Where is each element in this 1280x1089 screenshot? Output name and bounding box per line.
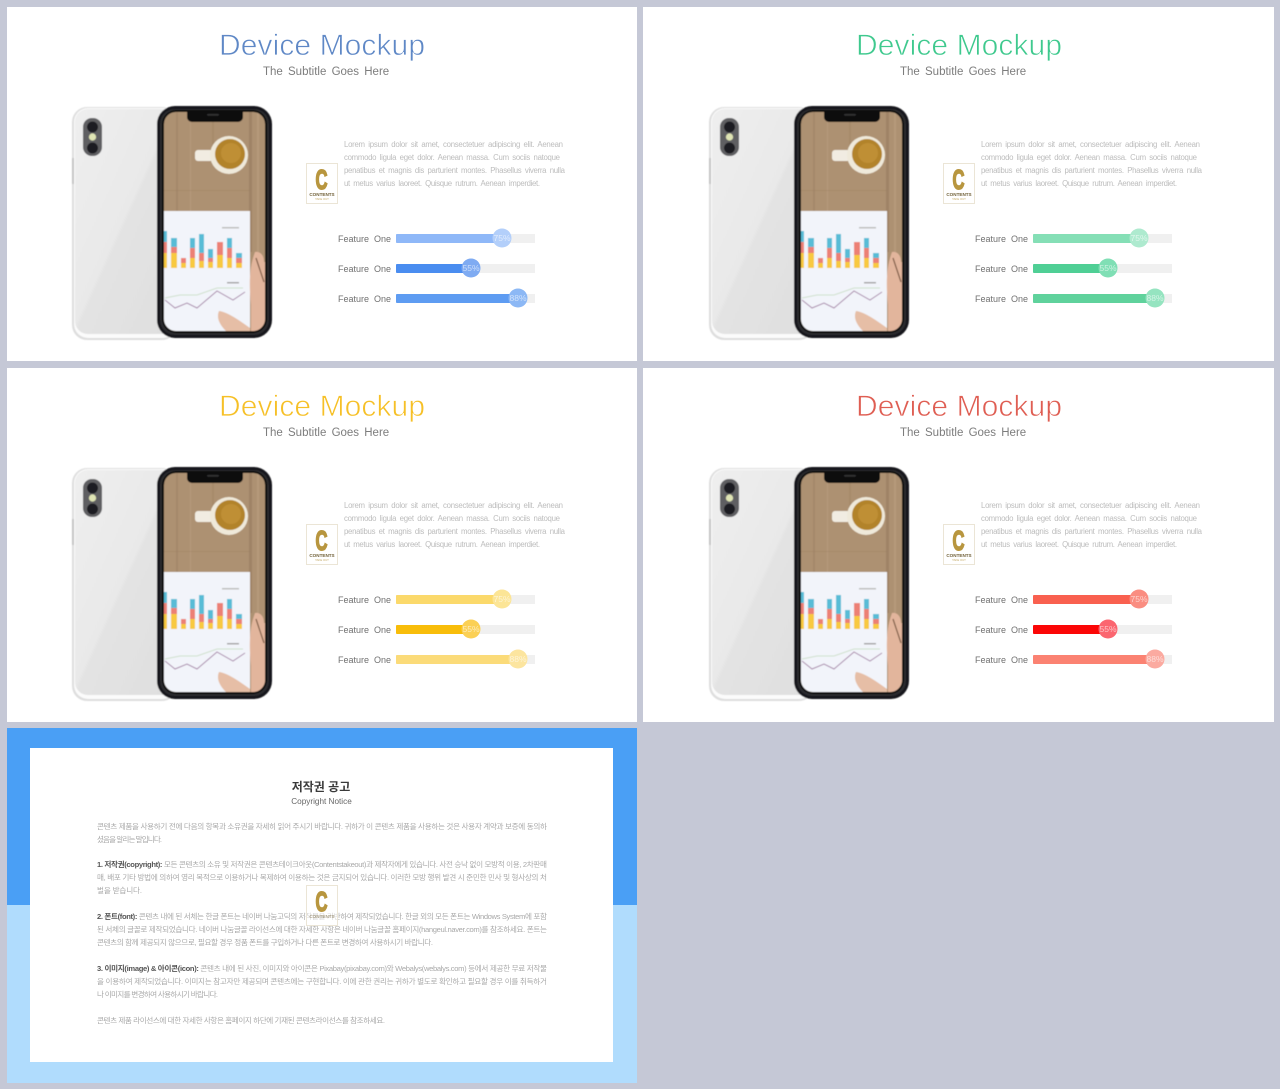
phone mockup image bbox=[72, 106, 272, 340]
phone mockup image bbox=[709, 467, 909, 701]
feature bar 2: Feature One bbox=[338, 625, 391, 635]
logo: C bbox=[316, 525, 328, 556]
feature bar 3: 88% bbox=[1146, 293, 1164, 303]
title: Device Mockup bbox=[219, 390, 425, 423]
panel: blue device mockup slide bbox=[7, 7, 637, 361]
panel: copyright notice slide bbox=[7, 728, 637, 1083]
description text: ut metus varius laoreet. Quisque rutrum. Aenean imperdiet. bbox=[981, 540, 1177, 549]
feature bar 3 bbox=[338, 288, 535, 308]
description text: commodo ligula eget dolor. Aenean massa. Cum sociis natoque bbox=[981, 153, 1197, 162]
description text: ut metus varius laoreet. Quisque rutrum. Aenean imperdiet. bbox=[981, 179, 1177, 188]
section: font: 된 서체의 글꼴로 제작되었습니다. 네이버 나눔글꼴 라이선스에 대한 자세한 사항은 네이버 나눔글꼴 홈페이지(hangeul.naver.com)를 참조하세요. 폰트는 bbox=[97, 924, 547, 934]
title: Device Mockup bbox=[219, 29, 425, 62]
section: font: 2. 폰트(font): 콘텐츠 내에 된 서체는 한글 폰트는 네이버 나눔고딕의 저작물을 기반하여 제작되었습니다. 한글 외의 모든 폰트는 Windows System에 포함 bbox=[97, 911, 547, 921]
phone mockup image bbox=[72, 467, 272, 701]
feature bar 3 bbox=[975, 650, 1172, 668]
section: image and icon: 을 이용하여 제작되었습니다. 이미지는 참고자만 제공되며 콘텐츠에는 구현합니다. 이에 관한 권리는 귀하가 별도로 확인하고 필요할 경우 이를 취득하거 bbox=[97, 976, 547, 986]
description text: Lorem ipsum dolor sit amet, consectetuer adipiscing elit. Aenean bbox=[344, 140, 563, 149]
feature bar 3: Feature One bbox=[975, 655, 1028, 665]
description text: commodo ligula eget dolor. Aenean massa. Cum sociis natoque bbox=[344, 514, 560, 523]
logo bbox=[306, 164, 338, 204]
logo: C bbox=[316, 164, 328, 195]
description text: Lorem ipsum dolor sit amet, consectetuer adipiscing elit. Aenean bbox=[981, 140, 1200, 149]
notice introduction: 셨음을 알리는 말입니다. bbox=[97, 834, 162, 844]
feature bar 2: Feature One bbox=[338, 264, 391, 274]
feature bar 2: 55% bbox=[462, 624, 480, 634]
logo watermark: C bbox=[316, 886, 328, 917]
description text: ut metus varius laoreet. Quisque rutrum. Aenean imperdiet. bbox=[344, 179, 540, 188]
feature bar 1: Feature One bbox=[338, 234, 391, 244]
logo bbox=[944, 164, 974, 204]
description text bbox=[344, 501, 566, 549]
logo: CONTENTS bbox=[946, 553, 972, 558]
logo bbox=[944, 524, 974, 564]
panel: green device mockup slide bbox=[643, 7, 1274, 361]
section: copyright bbox=[97, 859, 547, 895]
description text: penatibus et magnis dis parturient montes. Phasellus viverra nulla bbox=[344, 527, 566, 536]
logo watermark: CONTENTS bbox=[309, 914, 335, 919]
feature bar 2: 55% bbox=[1099, 263, 1117, 273]
feature bar 2 bbox=[338, 620, 535, 638]
feature bar 2 bbox=[338, 258, 535, 278]
description text: penatibus et magnis dis parturient montes. Phasellus viverra nulla bbox=[981, 527, 1203, 536]
logo: CONTENTS bbox=[946, 192, 972, 197]
feature bar 1: Feature One bbox=[338, 595, 391, 605]
subtitle: The Subtitle Goes Here bbox=[263, 66, 389, 78]
feature bar 1: 75% bbox=[1130, 594, 1148, 604]
subtitle: The Subtitle Goes Here bbox=[263, 427, 389, 439]
description text bbox=[344, 140, 566, 188]
title: Device Mockup bbox=[856, 29, 1062, 62]
feature bar 2: 55% bbox=[462, 263, 480, 273]
logo bbox=[306, 524, 338, 564]
subtitle: The Subtitle Goes Here bbox=[900, 66, 1026, 78]
description text: ut metus varius laoreet. Quisque rutrum. Aenean imperdiet. bbox=[344, 540, 540, 549]
logo: TAKE OUT bbox=[952, 197, 966, 201]
feature bar 3: Feature One bbox=[338, 294, 391, 304]
logo: CONTENTS bbox=[309, 553, 335, 558]
notice subheading: Copyright Notice bbox=[291, 797, 352, 806]
description text: commodo ligula eget dolor. Aenean massa. Cum sociis natoque bbox=[981, 514, 1197, 523]
feature bar 3 bbox=[338, 650, 535, 668]
notice heading: 저작권 공고 bbox=[292, 779, 350, 794]
title: Device Mockup bbox=[856, 390, 1062, 423]
feature bar 3 bbox=[975, 288, 1172, 308]
logo watermark bbox=[306, 886, 338, 926]
feature bar 3: Feature One bbox=[975, 294, 1028, 304]
panel: yellow device mockup slide bbox=[7, 368, 637, 722]
section: image and icon: 3. 이미지(image) & 아이콘(icon): 콘텐츠 내에 된 사진, 이미지와 아이콘은 Pixabay(pixabay.com)와 Webalys(webalys.com) 등에서 제공한 무료 저작물 bbox=[97, 963, 547, 973]
logo: CONTENTS bbox=[309, 192, 335, 197]
description text: commodo ligula eget dolor. Aenean massa. Cum sociis natoque bbox=[344, 153, 560, 162]
logo: C bbox=[952, 164, 964, 195]
feature bar 2: Feature One bbox=[975, 264, 1028, 274]
feature bar 3: 88% bbox=[1146, 654, 1164, 664]
logo: TAKE OUT bbox=[952, 558, 966, 562]
section: copyright: 1. 저작권(copyright): 모든 콘텐츠의 소유 및 저작권은 콘텐츠테이크아웃(Contentstakeout)과 제작자에게 있습니다. 사전 승낙 없이 모방적 이용, 2차판매 bbox=[97, 859, 547, 869]
logo: C bbox=[952, 525, 964, 556]
logo: TAKE OUT bbox=[315, 197, 329, 201]
feature bar 1 bbox=[975, 228, 1172, 248]
feature bar 1 bbox=[975, 590, 1172, 608]
description text: Lorem ipsum dolor sit amet, consectetuer adipiscing elit. Aenean bbox=[344, 501, 563, 510]
description text: penatibus et magnis dis parturient montes. Phasellus viverra nulla bbox=[981, 166, 1203, 175]
description text bbox=[981, 140, 1203, 188]
feature bar 3: Feature One bbox=[338, 655, 391, 665]
notice introduction bbox=[97, 821, 547, 844]
subtitle: The Subtitle Goes Here bbox=[900, 427, 1026, 439]
feature bar 1 bbox=[338, 228, 535, 248]
feature bar 1 bbox=[338, 590, 535, 608]
feature bar 1: 75% bbox=[493, 594, 511, 604]
feature bar 2 bbox=[975, 620, 1172, 638]
section: font: 콘텐츠의 함께 제공되지 않으므로, 필요할 경우 정품 폰트를 구입하거나 다른 폰트로 변경하여 사용하시기 바랍니다. bbox=[97, 937, 433, 947]
description text: penatibus et magnis dis parturient montes. Phasellus viverra nulla bbox=[344, 166, 566, 175]
feature bar 2: Feature One bbox=[975, 625, 1028, 635]
feature bar 3: 88% bbox=[509, 654, 527, 664]
feature bar 1: Feature One bbox=[975, 234, 1028, 244]
license note: 콘텐츠 제품 라이선스에 대한 자세한 사항은 홈페이지 하단에 기재된 콘텐츠라이선스를 참조하세요. bbox=[97, 1015, 385, 1025]
phone mockup image bbox=[709, 106, 909, 340]
section: font bbox=[97, 911, 547, 947]
feature bar 1: 75% bbox=[493, 233, 511, 243]
section: image and icon: 나 이미지를 변경하여 사용하시기 바랍니다. bbox=[97, 989, 218, 999]
feature bar 2: 55% bbox=[1099, 624, 1117, 634]
panel: red device mockup slide bbox=[643, 368, 1274, 722]
logo: TAKE OUT bbox=[315, 558, 329, 562]
description text bbox=[981, 501, 1203, 549]
section: copyright: 벌을 받습니다. bbox=[97, 885, 142, 895]
feature bar 1: 75% bbox=[1130, 233, 1148, 243]
feature bar 1: Feature One bbox=[975, 595, 1028, 605]
section: copyright: 매, 배포 기타 방법에 의하여 영리 목적으로 이용하거나 복제하여 이용하는 것은 금지되어 있습니다. 이러한 모방 행위 발견 시 준민한 민사 및 형사상의 처 bbox=[97, 872, 547, 882]
description text: Lorem ipsum dolor sit amet, consectetuer adipiscing elit. Aenean bbox=[981, 501, 1200, 510]
feature bar 2 bbox=[975, 258, 1172, 278]
notice introduction: 콘텐츠 제품을 사용하기 전에 다음의 항목과 소유권을 자세히 읽어 주시기 바랍니다. 귀하가 이 콘텐츠 제품을 사용하는 것은 사용자 계약과 보증에 동의하 bbox=[97, 821, 547, 831]
section: image and icon bbox=[97, 963, 547, 999]
feature bar 3: 88% bbox=[509, 293, 527, 303]
